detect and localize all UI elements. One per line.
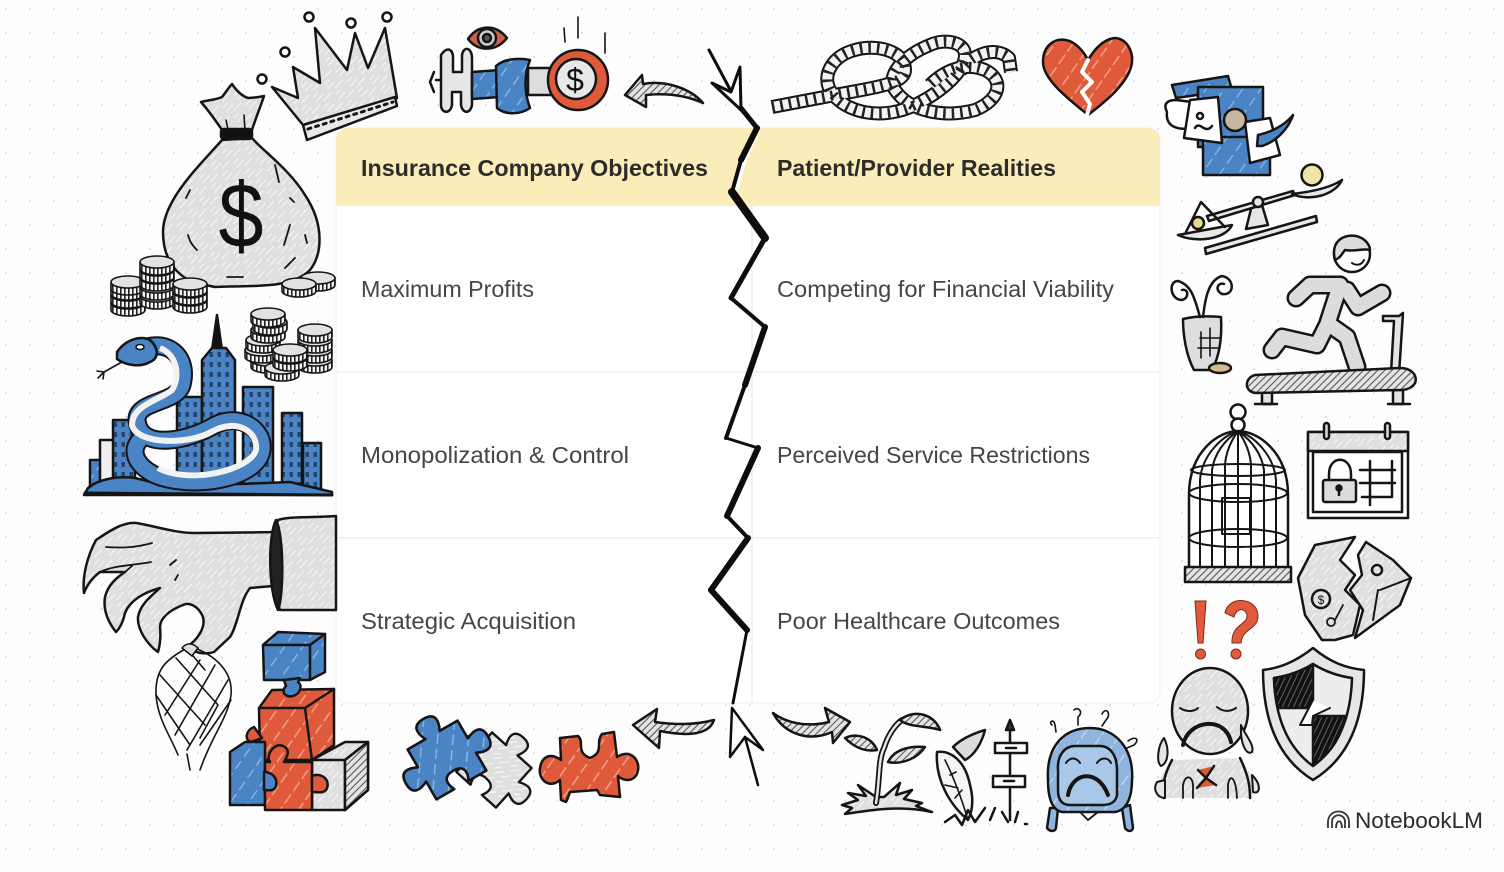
cell: poor healthcare outcomes: Poor Healthcare Outcomes xyxy=(777,608,1060,634)
icon: crying patient xyxy=(1155,668,1259,798)
treadmill xyxy=(1247,313,1416,404)
cell: strategic acquisition: Strategic Acquisition xyxy=(361,608,576,634)
icon: cracked rock xyxy=(1298,537,1411,640)
icon: snake around city xyxy=(84,315,332,495)
cell: maximum profits: Maximum Profits xyxy=(361,276,534,302)
panel: comparison table xyxy=(336,128,1160,703)
icon: wilted leaf and signpost xyxy=(937,720,1027,825)
icon: exclamation and question marks xyxy=(1195,601,1258,659)
icon: money bag xyxy=(163,84,320,287)
icon: notebook arcs xyxy=(1328,812,1349,828)
icon: cracked rock: $ xyxy=(1318,593,1325,607)
row dividers xyxy=(336,206,1160,703)
head xyxy=(1334,236,1370,272)
icon: coin stacks above city xyxy=(245,308,332,381)
logo: NotebookLM xyxy=(1328,808,1483,833)
icon: coin stacks by money bag xyxy=(111,256,335,316)
icon: runner on treadmill xyxy=(1247,236,1416,404)
icon: bird cage xyxy=(1185,404,1291,582)
arrow: top xyxy=(625,75,703,107)
icon: unbalanced scale xyxy=(1178,164,1342,254)
icon: lightning crack divider xyxy=(709,50,765,785)
cell: perceived service restrictions: Perceived Service Restrictions xyxy=(777,442,1090,468)
icon: small eye xyxy=(468,28,507,49)
heading: insurance company objectives: Insurance Company Objectives xyxy=(361,155,708,181)
icon: sad blue robot xyxy=(1047,709,1137,831)
question marks xyxy=(1051,709,1137,748)
icon: tangled rope knot xyxy=(772,42,1011,113)
icon: money bag: $ xyxy=(218,165,264,267)
icon: net xyxy=(156,644,231,770)
icon: crown xyxy=(258,12,397,140)
icon: broken heart xyxy=(1043,38,1132,115)
icon: jigsaw pieces xyxy=(382,695,638,819)
motion lines xyxy=(564,17,605,53)
arrow: bottom right xyxy=(773,708,850,743)
icon: locked calendar xyxy=(1308,423,1408,518)
icon: stacked puzzle blocks xyxy=(230,632,368,810)
cell: monopolization and control: Monopolization & Control xyxy=(361,442,629,468)
table header band xyxy=(336,128,1160,206)
icon: scattered documents xyxy=(1165,76,1293,175)
cell: competing for financial viability: Competing for Financial Viability xyxy=(777,276,1115,302)
icon: grasping hand with sleeve xyxy=(84,516,336,653)
icon: sprout xyxy=(842,714,940,814)
logo text: NotebookLM xyxy=(1355,808,1483,833)
icon: hand reaching for coin xyxy=(430,17,608,113)
heading: patient provider realities: Patient/Provider Realities xyxy=(777,155,1056,181)
icon: wilting vase xyxy=(1172,276,1232,373)
icon: cracked shield xyxy=(1263,648,1364,780)
arrow: bottom left xyxy=(633,709,714,748)
icon: hand reaching for coin: $ xyxy=(566,62,584,98)
